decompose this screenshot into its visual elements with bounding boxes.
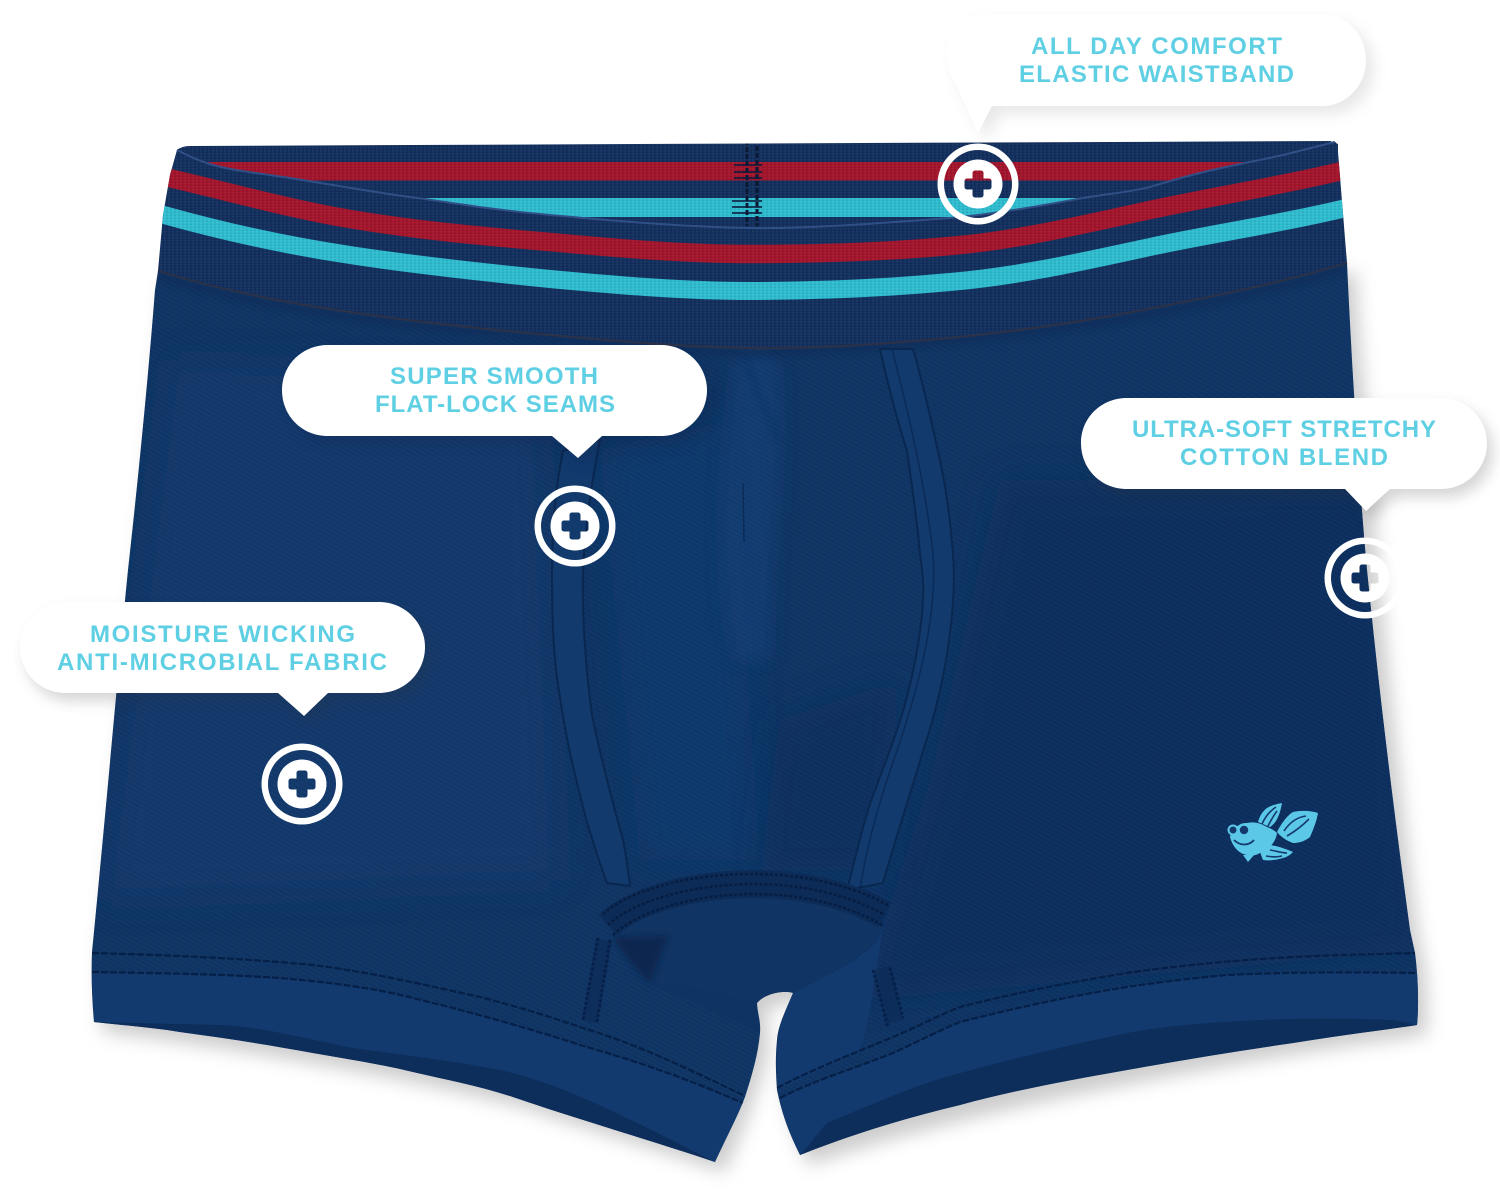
marker: cotton blend [1324, 538, 1392, 618]
callout: flat-lock seams: SUPER SMOOTH [390, 363, 598, 390]
callout: moisture wicking: MOISTURE WICKING [90, 621, 355, 648]
callout: flat-lock seams [282, 345, 713, 466]
callout: cotton blend: ULTRA-SOFT STRETCHY [1132, 416, 1436, 443]
fly seam left [552, 440, 630, 886]
shadow under waistband [158, 268, 1347, 353]
right leg tonal shading [1362, 506, 1416, 956]
callout: moisture wicking: ANTI-MICROBIAL FABRIC [57, 649, 387, 676]
garment body fabric [80, 260, 1430, 1170]
waistband lip highlight [177, 142, 1335, 228]
marker: waistband [937, 143, 1019, 225]
callout: flat-lock seams: FLAT-LOCK SEAMS [375, 391, 615, 418]
right leg hem band [800, 1018, 1416, 1155]
waistband seam [158, 263, 1347, 348]
callout: all day comfort: ALL DAY COMFORT [1031, 33, 1282, 60]
callout: all day comfort: ELASTIC WAISTBAND [1019, 61, 1294, 88]
side rib seams [583, 938, 903, 1028]
callout: cotton blend [1081, 398, 1493, 519]
boxer brief garment [80, 140, 1430, 1172]
front red stripe [150, 169, 1350, 254]
waistband inner back [177, 141, 1338, 228]
pouch tonal shading [600, 420, 760, 860]
callout: cotton blend: COTTON BLEND [1180, 444, 1388, 471]
crotch panels [757, 992, 793, 1003]
waistband front [150, 140, 1355, 355]
left leg hem band [94, 1020, 714, 1162]
center back stitching [747, 140, 757, 226]
left leg tonal shading [98, 517, 134, 894]
fish logo [1228, 803, 1318, 862]
marker: seams [534, 485, 616, 567]
marker: moisture wicking [261, 743, 343, 825]
front teal stripe [150, 207, 1350, 291]
crotch ribbed seam [603, 874, 888, 935]
callout: all day comfort [947, 14, 1374, 141]
callout: moisture wicking [20, 602, 431, 724]
hem stitching [92, 953, 1417, 1103]
fly seam right [847, 349, 954, 890]
garment drop shadow [101, 273, 1427, 1172]
